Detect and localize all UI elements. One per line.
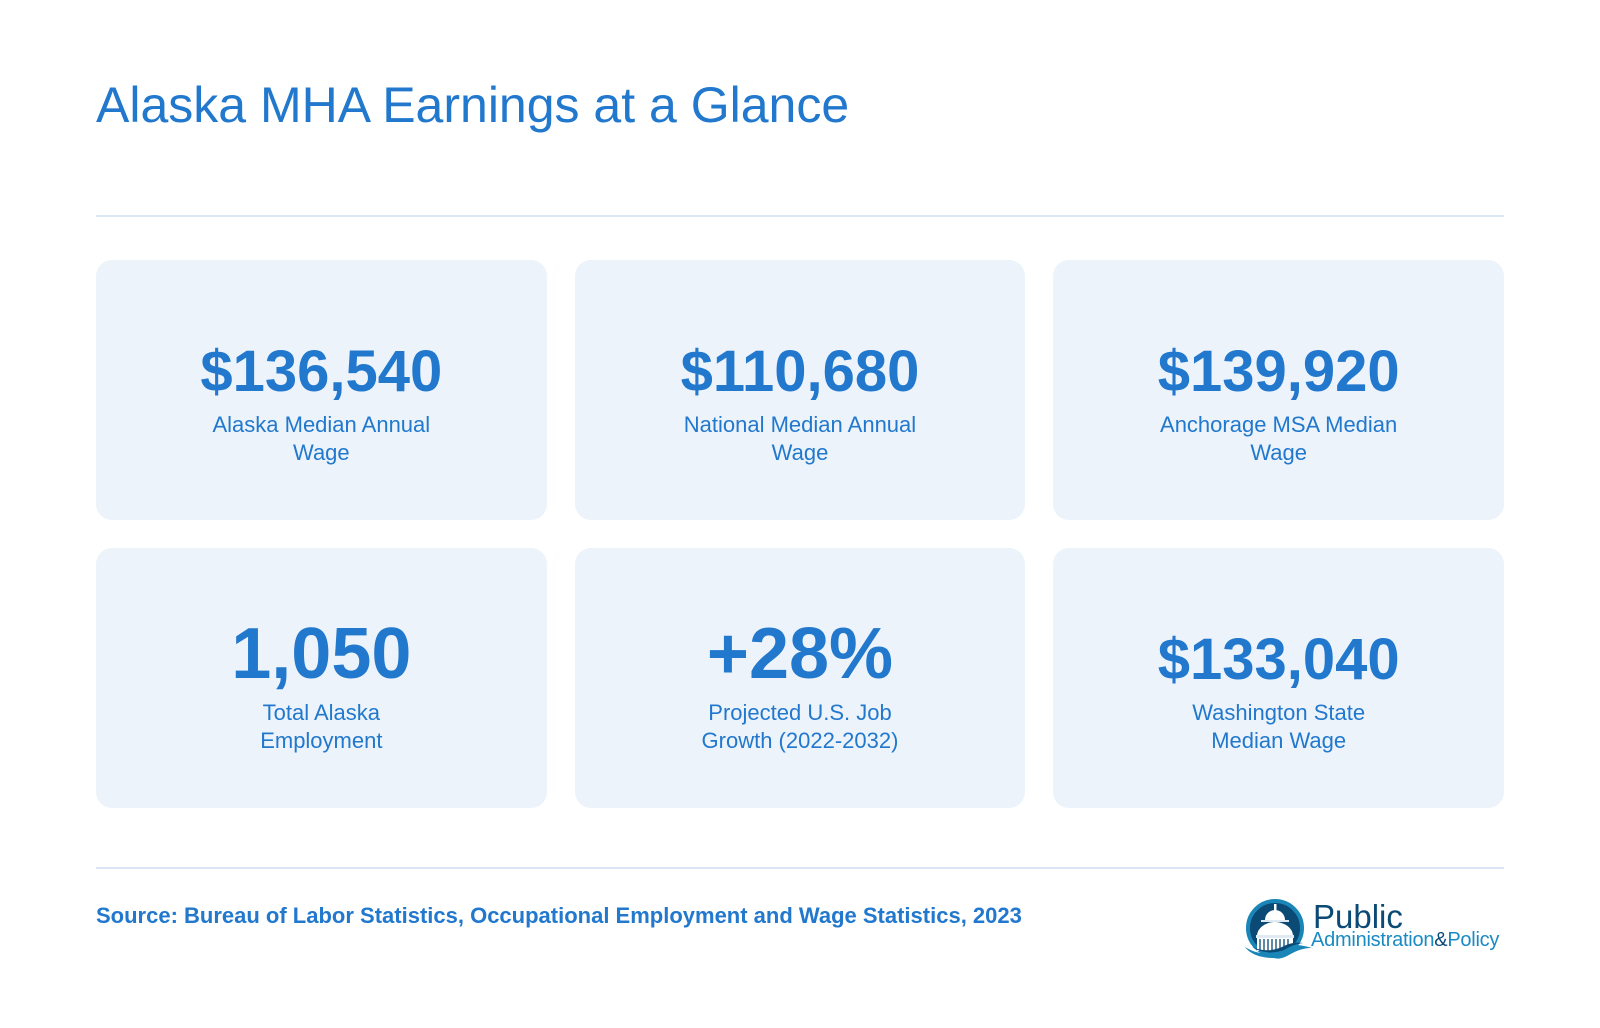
panel: total Alaska employment	[96, 548, 547, 808]
panel: projected job growth: Projected U.S. Job	[708, 700, 892, 725]
panel: total Alaska employment: 1,050	[231, 614, 411, 694]
panel: Alaska median annual wage	[96, 260, 547, 520]
panel: Washington State median wage	[1053, 548, 1504, 808]
title: Alaska MHA Earnings at a Glance	[96, 77, 849, 133]
panel: total Alaska employment: Total Alaska	[263, 700, 380, 725]
logo: Public Administration & Policy	[1245, 898, 1500, 959]
panel: national median annual wage: National Median Annual	[684, 412, 916, 437]
panel: projected job growth: Growth (2022-2032)	[702, 728, 898, 753]
panel: Anchorage MSA median wage: $139,920	[1158, 339, 1400, 404]
panel: Alaska median annual wage: Alaska Median Annual	[212, 412, 430, 437]
panel: total Alaska employment: Employment	[260, 728, 382, 753]
panel: Alaska median annual wage: Wage	[293, 440, 350, 465]
panel: Washington State median wage: Washington State	[1192, 700, 1365, 725]
panel: Anchorage MSA median wage: Wage	[1250, 440, 1307, 465]
panel: projected job growth: +28%	[707, 614, 893, 694]
panel: national median annual wage: $110,680	[681, 339, 919, 404]
logo: Public Administration & Policy: Administration&Policy	[1311, 929, 1499, 951]
icon: capitol dome	[1245, 899, 1312, 959]
panel: Washington State median wage: Median Wage	[1211, 728, 1346, 753]
source note: Source: Bureau of Labor Statistics, Occupational Employment and Wage Statistics, 2023	[96, 903, 1022, 928]
logo wordmark: Public	[1313, 898, 1403, 935]
panel: Washington State median wage: $133,040	[1158, 627, 1400, 692]
panel: projected job growth	[575, 548, 1025, 808]
panel: national median annual wage: Wage	[772, 440, 828, 465]
panel: Alaska median annual wage: $136,540	[200, 339, 442, 404]
panel: Anchorage MSA median wage: Anchorage MSA Median	[1160, 412, 1397, 437]
panel: national median annual wage	[575, 260, 1025, 520]
panel: Anchorage MSA median wage	[1053, 260, 1504, 520]
